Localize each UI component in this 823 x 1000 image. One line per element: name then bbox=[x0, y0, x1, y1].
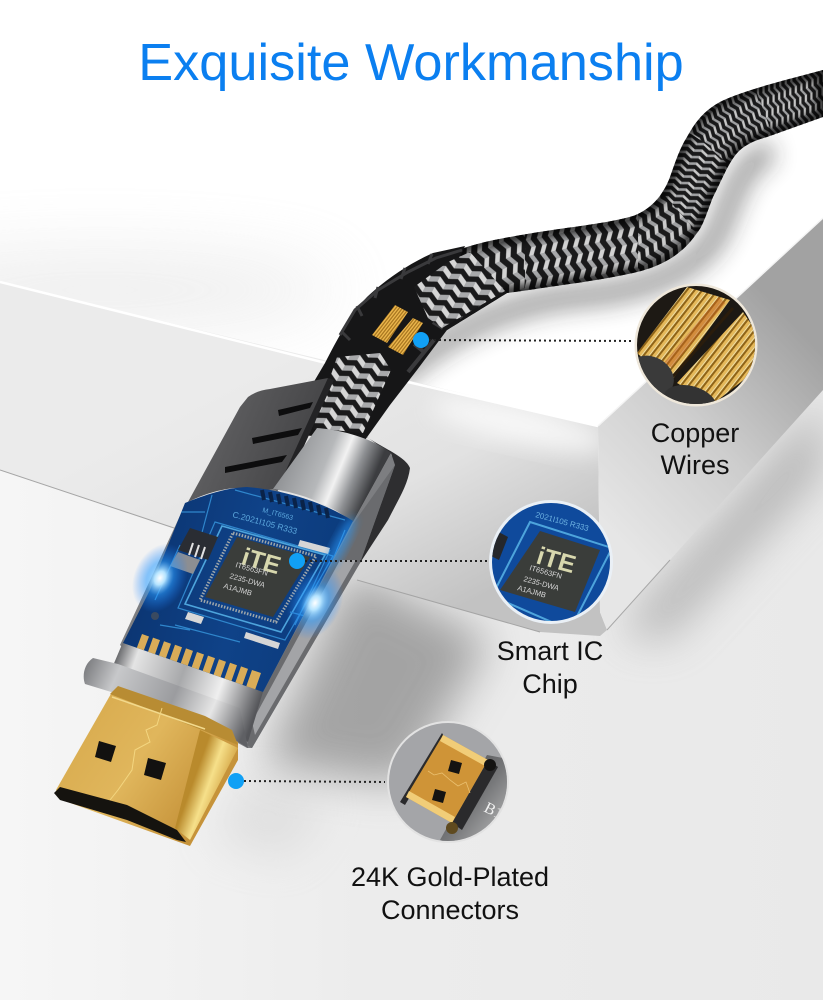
IC chip bbox=[200, 533, 316, 622]
circuit board: M_IT6563 bbox=[261, 507, 294, 522]
IC chip: 2235-DWA bbox=[228, 571, 266, 590]
callout dot and leader: gold connector bbox=[228, 773, 385, 789]
strain relief with cut-away bbox=[300, 246, 507, 440]
IC chip: IT6563FN bbox=[234, 560, 269, 578]
lower braid window bbox=[313, 353, 391, 433]
serrated top of board bbox=[262, 490, 328, 518]
copper conductors bbox=[372, 305, 423, 355]
IC chip: iTE bbox=[238, 543, 284, 580]
detail circle: copper wires bbox=[634, 284, 758, 406]
label: gold plated connectors: Connectors bbox=[381, 895, 519, 925]
label: gold plated connectors: 24K Gold-Plated bbox=[351, 862, 549, 892]
label: copper wires: Wires bbox=[660, 450, 730, 480]
plug holes bbox=[95, 741, 166, 780]
HDMI gold plug bbox=[54, 686, 238, 846]
detail circle: smart IC chip: 2235-DWA bbox=[522, 574, 560, 593]
block: floor and faces bbox=[0, 218, 823, 1000]
braided cable bbox=[447, 70, 823, 330]
IC chip: A1AJMB bbox=[222, 581, 253, 598]
title: Exquisite Workmanship bbox=[138, 34, 684, 92]
detail circle: smart IC chip bbox=[489, 500, 613, 624]
label: smart IC chip: Chip bbox=[522, 669, 578, 699]
label: smart IC chip: Smart IC bbox=[497, 636, 603, 666]
detail circle: smart IC chip: 2021I105 R333 bbox=[534, 510, 590, 533]
upper braid window bbox=[414, 252, 505, 328]
blue glow highlights bbox=[121, 513, 361, 648]
detail circle: smart IC chip: IT6563FN bbox=[528, 563, 563, 581]
circuit board: C.2021I105 R333 bbox=[231, 509, 299, 536]
gold edge fingers bbox=[136, 634, 261, 690]
circuit board bbox=[123, 487, 353, 692]
callout dot and leader: copper wires bbox=[413, 332, 634, 348]
detail circle: smart IC chip: iTE bbox=[533, 542, 579, 579]
callout dot and leader: smart IC chip bbox=[289, 553, 488, 569]
detail circle: gold connector bbox=[387, 721, 509, 843]
connector boot bbox=[188, 378, 410, 566]
detail circle: smart IC chip: A1AJMB bbox=[516, 583, 547, 600]
left components bbox=[178, 528, 218, 560]
label: copper wires: Copper bbox=[651, 418, 739, 448]
detail circle: gold connector: B1 bbox=[481, 799, 506, 823]
metal body bbox=[84, 428, 395, 748]
